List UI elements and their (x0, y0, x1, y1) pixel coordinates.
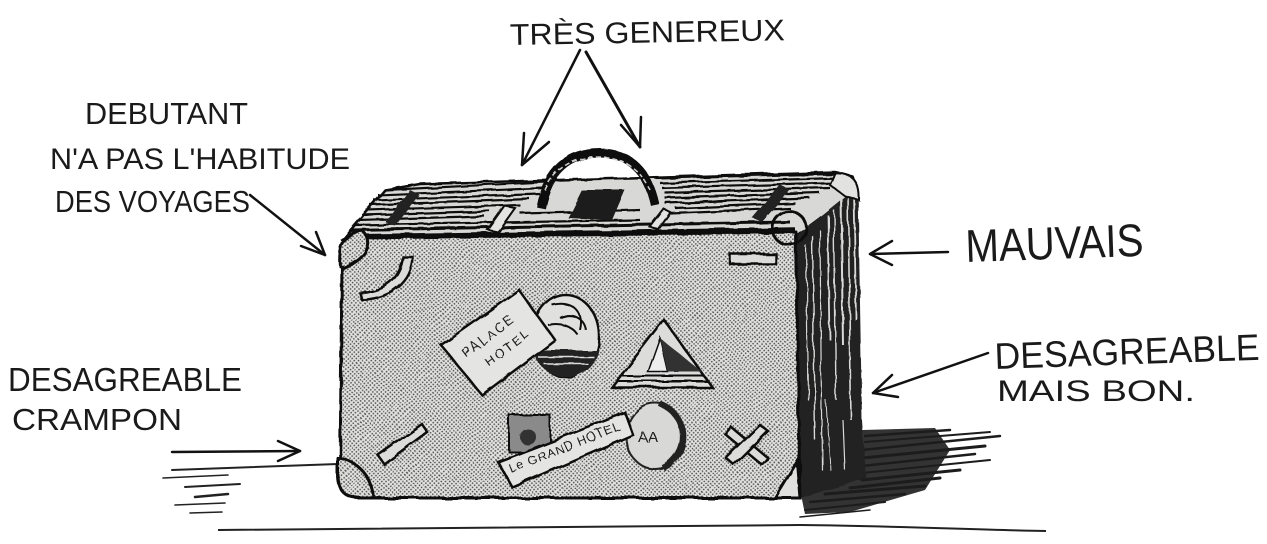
corner guards (338, 211, 806, 498)
label: debutant: DES VOYAGES (55, 184, 250, 219)
arrows: tres genereux (522, 50, 641, 165)
arrow: crampon (172, 441, 300, 461)
sticker: palace hotel: HOTEL (482, 325, 533, 369)
label: desagreable crampon: DESAGREABLE (8, 361, 242, 398)
sticker: square stamp (509, 415, 550, 452)
sticker: palace hotel: PALACE (459, 311, 518, 360)
sticker: round rooster (533, 295, 599, 377)
lid top (342, 172, 858, 240)
arrow: debutant (250, 195, 325, 255)
label: debutant: N'A PAS L'HABITUDE (50, 143, 350, 176)
label: desagreable mais bon (994, 327, 1260, 408)
front face (340, 232, 800, 498)
strap marks (360, 254, 776, 465)
label: desagreable crampon (8, 361, 242, 437)
side panel (796, 173, 866, 498)
lid latches (385, 190, 420, 226)
label: desagreable crampon: CRAMPON (12, 402, 182, 437)
sticker: round stamp (626, 403, 684, 469)
title label: tres genereux: TRÈS GENEREUX (510, 14, 785, 52)
label: debutant: DEBUTANT (85, 96, 248, 131)
label: debutant (50, 96, 350, 219)
suitcase (338, 153, 866, 498)
cast shadow (800, 428, 1000, 517)
floor line (218, 525, 1046, 531)
sticker: pyramid (612, 320, 712, 387)
label: mauvais: MAUVAIS (965, 214, 1144, 272)
handle (541, 153, 655, 208)
straps on lid (488, 206, 515, 232)
label: desagreable mais bon: MAIS BON. (997, 375, 1195, 408)
arrow: desagreable mais bon (873, 353, 988, 397)
sticker: round stamp: AA (638, 429, 658, 446)
handle plate (568, 190, 625, 220)
sticker: le grand hotel (498, 413, 633, 487)
floor strokes left (163, 464, 338, 513)
arrow: mauvais (870, 241, 948, 265)
sticker: le grand hotel: Le GRAND HOTEL (507, 419, 623, 476)
sticker: palace hotel (441, 290, 555, 395)
label: desagreable mais bon: DESAGREABLE (994, 327, 1260, 377)
